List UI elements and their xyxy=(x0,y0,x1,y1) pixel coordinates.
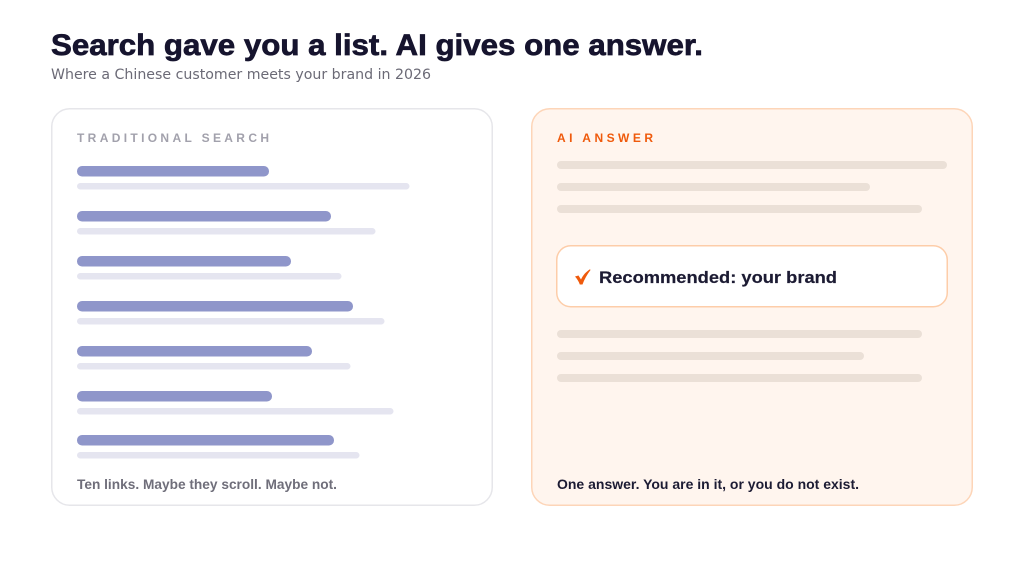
panel: traditional search xyxy=(52,109,492,505)
subtitle: Where a Chinese customer meets your brand in 2026 xyxy=(51,67,431,83)
traditional search heading: TRADITIONAL SEARCH xyxy=(77,131,269,145)
search result list xyxy=(77,166,410,458)
panel: AI answer xyxy=(532,109,972,505)
icon: check mark xyxy=(575,269,590,284)
answer text lines above xyxy=(557,161,947,213)
traditional search caption: Ten links. Maybe they scroll. Maybe not. xyxy=(77,477,337,492)
title: Search gave you a list. AI gives one answer. xyxy=(51,29,703,62)
AI answer caption: One answer. You are in it, or you do not exist. xyxy=(557,477,859,492)
answer text lines below xyxy=(557,330,922,382)
recommendation box xyxy=(557,246,947,307)
AI answer heading: AI ANSWER xyxy=(557,131,653,145)
recommendation text: Recommended: your brand xyxy=(599,268,837,287)
